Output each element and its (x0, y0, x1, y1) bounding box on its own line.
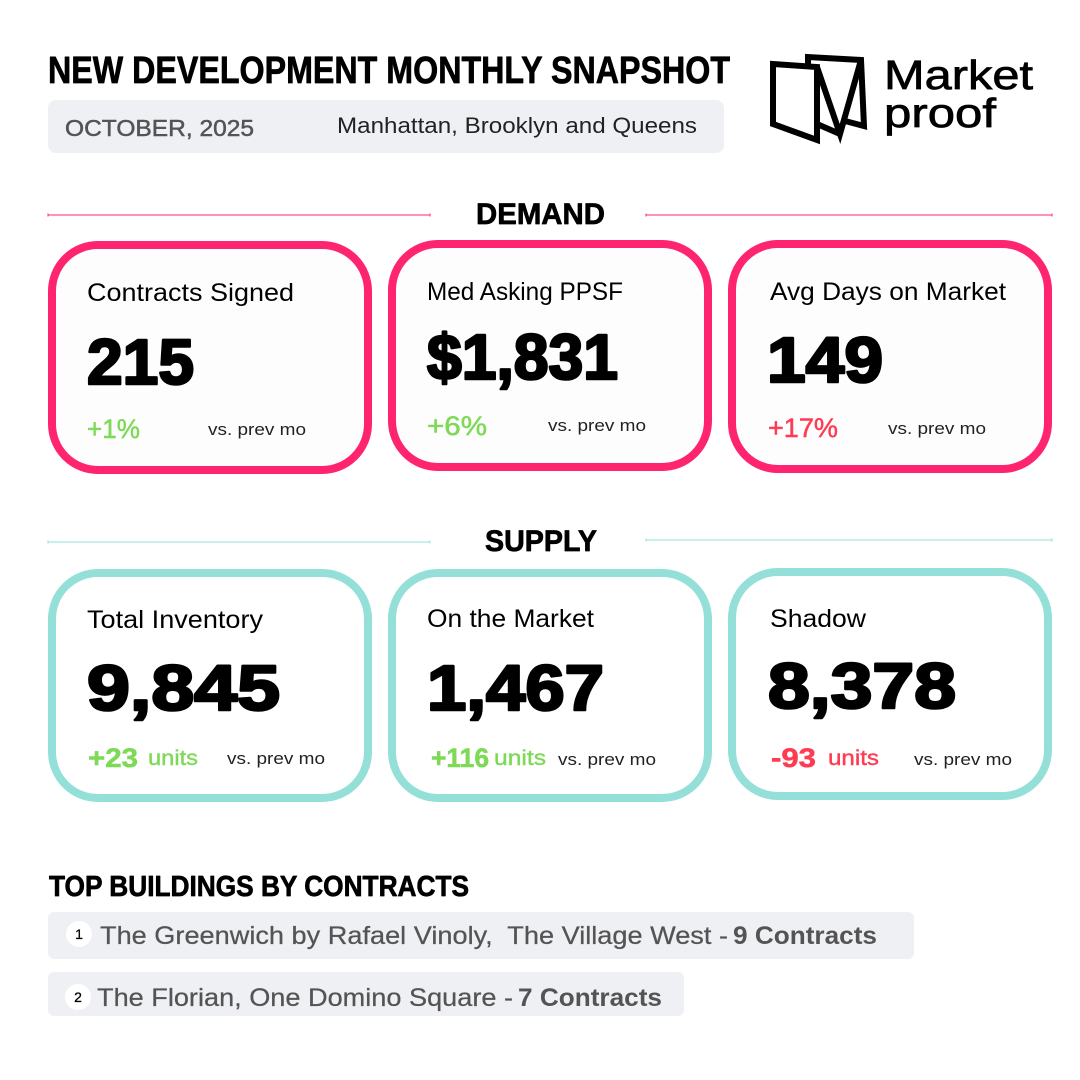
supply heading: SUPPLY (485, 525, 597, 558)
panel: median asking ppsf: $1,831 (427, 321, 618, 393)
top building 2: The Florian, One Domino Square - (97, 984, 513, 1012)
panel: on the market: On the Market (427, 605, 594, 633)
panel: on the market: +116 (431, 743, 489, 773)
panel: on the market: 1,467 (427, 652, 604, 724)
panel: total inventory: Total Inventory (87, 606, 264, 634)
top building 1: The Greenwich by Rafael Vinoly, The Village West - (100, 922, 728, 950)
panel: shadow: -93 (771, 743, 816, 773)
panel: total inventory: vs. prev mo (227, 749, 325, 768)
demand heading (48, 198, 1052, 231)
logo: Marketproof (773, 52, 1034, 140)
panel: contracts signed: Contracts Signed (87, 279, 294, 307)
panel: avg days on market: Avg Days on Market (770, 278, 1006, 306)
supply heading (48, 525, 1052, 558)
panel: contracts signed: vs. prev mo (208, 420, 306, 439)
panel: contracts signed (52, 245, 368, 470)
panel: median asking ppsf: vs. prev mo (548, 416, 646, 435)
panel: avg days on market (732, 244, 1048, 469)
top building 1: 1 (75, 926, 83, 942)
panel: median asking ppsf (392, 244, 708, 467)
panel: shadow: 8,378 (768, 650, 956, 722)
panel: median asking ppsf: +6% (427, 411, 487, 441)
panel: shadow: units (828, 747, 879, 770)
panel: on the market: units (494, 747, 546, 770)
panel: on the market: vs. prev mo (558, 750, 656, 769)
panel: contracts signed: +1% (87, 414, 140, 444)
panel: avg days on market: vs. prev mo (888, 419, 986, 438)
location: Manhattan, Brooklyn and Queens (337, 113, 697, 138)
panel: total inventory: units (148, 747, 198, 770)
panel: shadow: Shadow (770, 605, 867, 633)
panel: shadow: vs. prev mo (914, 750, 1012, 769)
panel: avg days on market: +17% (768, 413, 838, 443)
demand heading: DEMAND (476, 198, 605, 231)
logo wordmark (884, 52, 1034, 136)
logo wordmark: Market (884, 52, 1034, 98)
panel: total inventory: +23 (88, 743, 138, 773)
top building 1 (48, 912, 914, 959)
top building 2: 2 (74, 989, 82, 1005)
top building 2 (48, 972, 684, 1016)
panel: contracts signed: 215 (87, 326, 194, 398)
date: OCTOBER, 2025 (65, 115, 254, 141)
top buildings heading: TOP BUILDINGS BY CONTRACTS (49, 871, 469, 903)
panel: total inventory: 9,845 (87, 652, 280, 724)
top building 2: 7 Contracts (518, 984, 662, 1012)
panel: median asking ppsf: Med Asking PPSF (427, 278, 623, 306)
panel: total inventory (52, 573, 368, 798)
panel: on the market (392, 573, 708, 798)
date and location bar (48, 100, 724, 153)
logo mark (773, 57, 864, 140)
title: NEW DEVELOPMENT MONTHLY SNAPSHOT (48, 50, 730, 92)
panel: shadow (732, 572, 1048, 796)
panel: avg days on market: 149 (767, 324, 883, 396)
logo wordmark: proof (884, 90, 997, 136)
top building 1: 9 Contracts (733, 922, 877, 950)
